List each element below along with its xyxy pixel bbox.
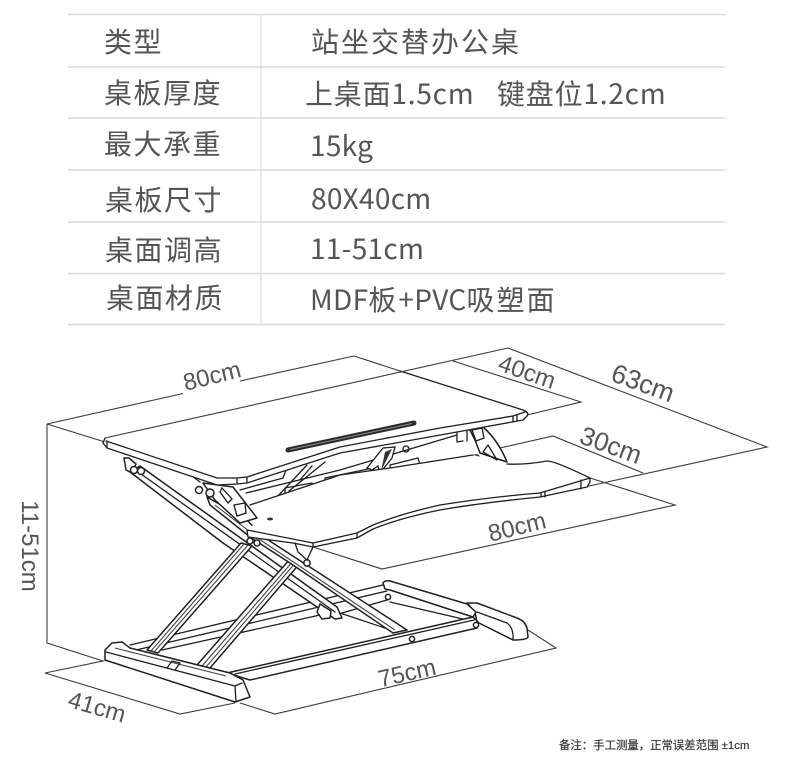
row: material label: 桌面材质 (106, 277, 224, 317)
scissor arm: leg one (147, 543, 252, 653)
under-desk support structure (240, 430, 467, 497)
dimension label: 75cm base width: 75cm (375, 654, 439, 693)
base: front long rails (227, 617, 479, 680)
footnote: 备注：手工测量，正常误差范围 ±1cm (559, 738, 749, 752)
left side bracket (180, 467, 257, 523)
row: type label: 类型 (104, 21, 163, 61)
row: material value: MDF板+PVC吸塑面 (310, 279, 557, 319)
right side bracket (470, 427, 511, 468)
dimension label: 11-51cm height: 11-51cm (16, 500, 43, 592)
row: type value: 站坐交替办公桌 (311, 21, 521, 61)
row: thickness value, keyboard tray: 键盘位1.2cm (497, 73, 666, 113)
dimension label: 80cm width: 80cm (180, 356, 244, 397)
base: rear cross bars (130, 584, 467, 650)
row: thickness value, top surface: 上桌面1.5cm (305, 73, 474, 113)
dimension label: 30cm tray depth: 30cm (576, 420, 646, 470)
dimension label: 80cm tray width: 80cm (485, 507, 549, 548)
row: height adjust value: 11-51cm (310, 228, 424, 268)
scissor arm: leg two (197, 559, 301, 668)
row: height adjust label: 桌面调高 (105, 229, 223, 269)
row: max load value: 15kg (310, 125, 373, 165)
tabletop (103, 348, 528, 485)
base: rear foot and frame (383, 581, 528, 640)
scissor arm: rear rail (130, 466, 342, 619)
hinge pins (124, 458, 391, 600)
row: max load label: 最大承重 (104, 123, 222, 163)
keyboard tray (247, 455, 590, 560)
standing desk riser illustration (103, 348, 590, 702)
base: front foot (105, 642, 250, 702)
specification table (68, 14, 726, 324)
scissor arm: front rail (207, 497, 407, 633)
row: board size label: 桌板尺寸 (105, 179, 223, 219)
row: board size value: 80X40cm (311, 178, 432, 218)
dimension label: 63cm total depth: 63cm (607, 358, 679, 408)
dimension outline lines (45, 348, 767, 714)
dimension label: 41cm base depth: 41cm (65, 686, 129, 729)
dimension label: 40cm depth: 40cm (495, 350, 559, 395)
row: thickness label: 桌板厚度 (104, 72, 222, 112)
